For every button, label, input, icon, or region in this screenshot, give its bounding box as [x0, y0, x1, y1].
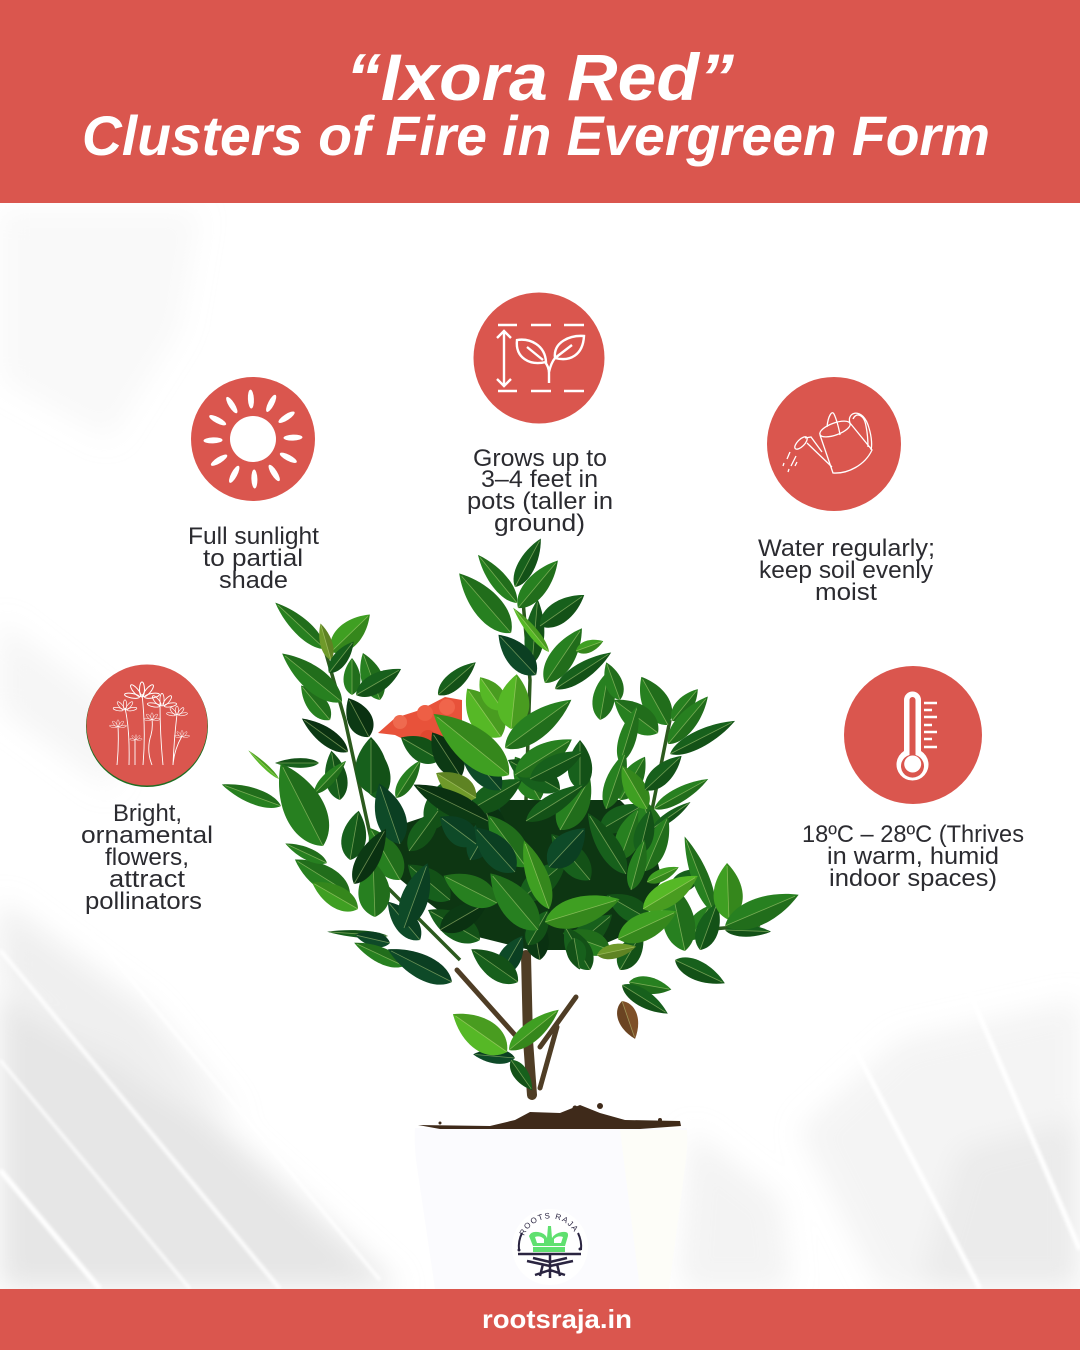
- label: water: [758, 535, 935, 606]
- feature: temperature: [802, 666, 1024, 892]
- label: temperature: in warm, humid: [827, 843, 999, 870]
- logo badge: ROOTS RAJA: [519, 1212, 578, 1236]
- feature: water: [758, 377, 935, 606]
- left branch leaves: [263, 596, 448, 933]
- back leaves: [219, 598, 729, 1094]
- label: height: pots (taller in: [467, 488, 613, 515]
- footer banner: [0, 1289, 1080, 1350]
- label: water: moist: [815, 579, 877, 606]
- crown: [529, 1226, 568, 1246]
- label: flowers: attract: [109, 866, 185, 893]
- soil: [418, 1103, 681, 1129]
- label: flowers: ornamental: [81, 822, 213, 849]
- icon: watering can: [783, 413, 872, 473]
- label: height: ground): [494, 510, 585, 537]
- label: temperature: indoor spaces): [829, 865, 997, 892]
- green branches: [325, 590, 760, 960]
- label: sunlight: Full sunlight: [188, 523, 319, 550]
- feature: height: [467, 292, 613, 537]
- label: sunlight: [188, 523, 319, 594]
- label: sunlight: shade: [219, 567, 288, 594]
- label: height: Grows up to: [473, 445, 607, 472]
- subtitle: Clusters of Fire in Evergreen Form: [82, 104, 990, 167]
- website url: rootsraja.in: [482, 1304, 632, 1334]
- flower cluster: [378, 697, 462, 752]
- stems: [457, 955, 576, 1095]
- header banner: [0, 0, 1080, 203]
- label: water: Water regularly;: [758, 535, 935, 562]
- feature: sunlight: [188, 377, 319, 594]
- label: water: keep soil evenly: [759, 557, 933, 584]
- label: temperature: [802, 821, 1024, 892]
- right branch leaves: [579, 670, 804, 954]
- icon: thermometer: [896, 692, 937, 781]
- roots: [518, 1254, 581, 1278]
- label: temperature: 18ºC – 28ºC (Thrives: [802, 821, 1024, 848]
- logo badge: [518, 1212, 582, 1278]
- label: flowers: Bright,: [113, 800, 182, 827]
- filler leaves: [294, 649, 718, 980]
- label: flowers: [81, 800, 213, 915]
- icon: flowers: [109, 682, 190, 765]
- title: “Ixora Red”: [346, 40, 734, 114]
- label: height: 3–4 feet in: [481, 466, 598, 493]
- label: sunlight: to partial: [203, 545, 303, 572]
- feature: flowers: [81, 664, 213, 915]
- pot with logo: [418, 1065, 681, 1278]
- label: height: [467, 445, 613, 537]
- plant photo: [219, 534, 804, 1095]
- label: flowers: flowers,: [105, 844, 189, 871]
- top stalk leaves: [449, 534, 616, 696]
- label: flowers: pollinators: [85, 888, 202, 915]
- icon: sun: [203, 389, 303, 489]
- icon: plant height: [497, 325, 584, 391]
- central bright leaves: [408, 671, 624, 1065]
- dark foliage mass: [385, 800, 662, 950]
